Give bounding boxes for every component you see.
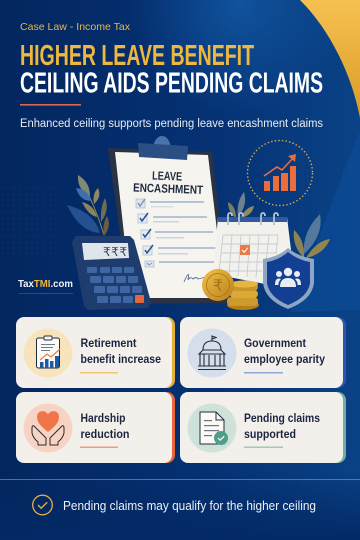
illustration: calendar xyxy=(213,213,291,284)
card: hardship reduction xyxy=(16,392,175,463)
card text xyxy=(244,336,325,366)
illustration: leaves right xyxy=(228,192,330,258)
card text: benefit increase xyxy=(80,352,161,366)
checklist xyxy=(136,199,217,267)
eyebrow label: Case Law - Income Tax xyxy=(20,21,131,33)
card text xyxy=(80,336,161,366)
clipboard heading: LEAVE xyxy=(152,169,182,184)
illustration: rupee coin xyxy=(202,269,234,301)
illustration: clipboard xyxy=(108,136,230,304)
illustration: shield xyxy=(263,248,314,309)
clip xyxy=(138,136,188,160)
subtitle: Enhanced ceiling supports pending leave encashment claims xyxy=(20,118,323,130)
icon: clipboard with chart xyxy=(24,328,72,378)
title xyxy=(20,40,323,100)
card text xyxy=(244,411,320,441)
illustration: rupee coin: ₹ xyxy=(213,278,223,295)
icon: government building xyxy=(188,328,236,378)
signature xyxy=(184,274,206,282)
card: retirement benefit increase xyxy=(16,317,175,388)
card text xyxy=(80,411,130,441)
accent rule xyxy=(20,104,81,106)
clipboard heading xyxy=(133,169,204,197)
title: HIGHER LEAVE BENEFIT xyxy=(20,40,254,72)
illustration: calculator xyxy=(72,236,151,310)
illustration: coin stack xyxy=(227,280,259,310)
card text: supported xyxy=(244,427,296,441)
icon: heart in hands xyxy=(24,404,72,452)
footer text: Pending claims may qualify for the higher ceiling xyxy=(63,499,316,513)
clipboard heading: ENCASHMENT xyxy=(133,181,204,197)
card text: employee parity xyxy=(244,352,325,366)
illustration: growth chart badge xyxy=(248,140,312,206)
card text: Pending claims xyxy=(244,411,320,425)
card text: Government xyxy=(244,336,306,350)
card text: Retirement xyxy=(80,336,136,350)
card: pending claims supported xyxy=(180,392,346,463)
footer check icon xyxy=(33,495,52,515)
card text: Hardship xyxy=(80,411,126,425)
card text: reduction xyxy=(80,427,130,441)
illustration: calculator: ₹₹₹ xyxy=(103,245,127,259)
icon: document with check xyxy=(188,404,236,452)
gold corner arc xyxy=(300,0,360,118)
logo: TaxTMI.com: TaxTMI.com xyxy=(18,279,73,290)
card: government employee parity xyxy=(180,317,346,388)
illustration: leaves left xyxy=(67,175,109,236)
